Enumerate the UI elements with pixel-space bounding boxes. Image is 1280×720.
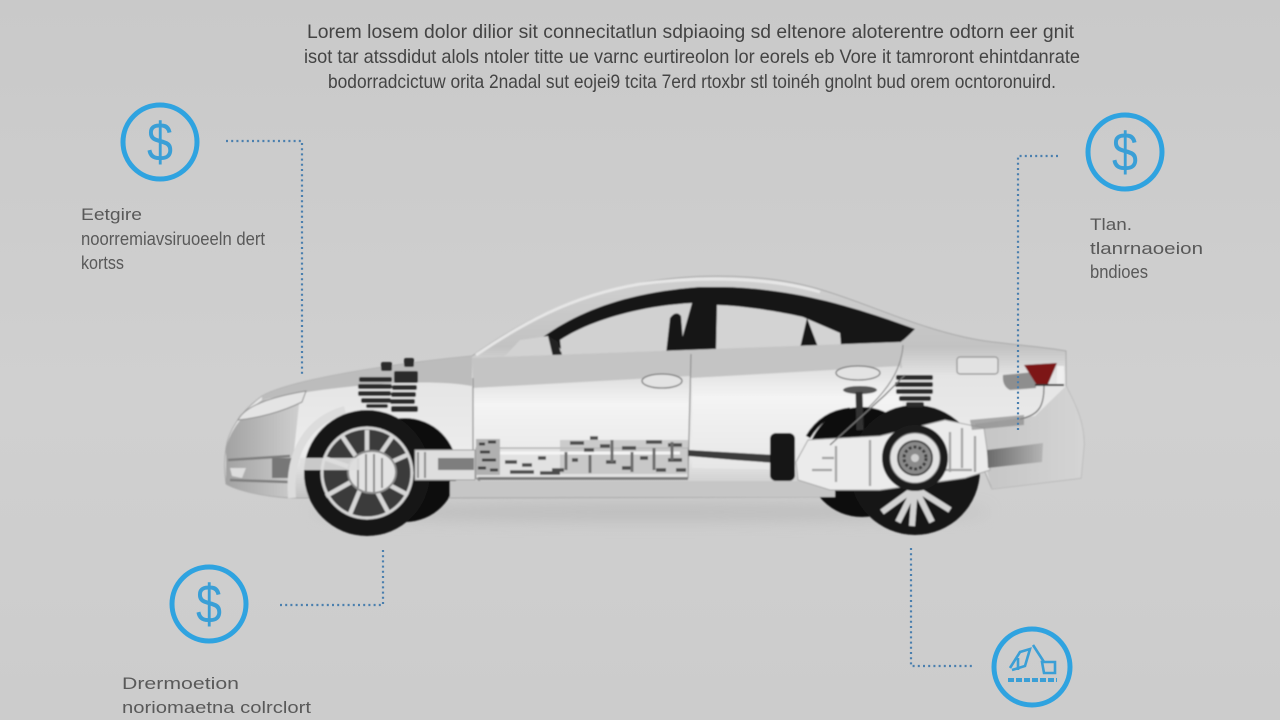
icon: dollar top right (1088, 115, 1162, 189)
icon: dollar bottom left: $ (196, 573, 222, 635)
roof highlight (476, 279, 820, 355)
label: transmission: tlanrnaoeion (1090, 239, 1203, 258)
differential (770, 433, 795, 481)
side mirror (503, 336, 562, 358)
front seat (666, 313, 684, 354)
label: transmission (1090, 215, 1203, 282)
beltline band (472, 342, 902, 388)
door seams (473, 345, 903, 482)
rear door (692, 366, 905, 470)
connector: drivetrain (280, 548, 383, 605)
front wheel (300, 410, 430, 536)
icon: dollar top right: $ (1112, 121, 1138, 183)
label: drivetrain: Drermoetion (122, 674, 239, 693)
icon: dollar top left: $ (147, 111, 173, 173)
rear lower dark band (987, 443, 1043, 468)
rear springs and strut (830, 375, 933, 445)
front springs (358, 358, 418, 412)
rear body crease (970, 415, 1024, 430)
headlight (238, 391, 306, 420)
intro paragraph (304, 21, 1080, 93)
label: engine: kortss (81, 253, 124, 273)
tail light (1003, 363, 1064, 419)
connector: engine (226, 141, 302, 375)
lower sill (450, 481, 835, 497)
car illustration (224, 276, 1084, 536)
rear wheel (850, 405, 980, 535)
intro paragraph: isot tar atssdidut alols ntoler titte ue varnc eurtireolon lor eorels eb Vore it tamroront ehintdanrate (304, 46, 1080, 68)
rear quarter panel (975, 386, 1084, 489)
front wheel arch (292, 410, 345, 498)
icon: tow truck (994, 629, 1070, 705)
underbody chassis (415, 438, 688, 480)
fuel flap (957, 357, 998, 374)
front door (473, 376, 690, 470)
label: drivetrain: noriomaetna colrclort (122, 698, 311, 717)
far wheel arch line (808, 410, 850, 437)
ground shadow (310, 503, 990, 521)
label: engine (81, 205, 265, 273)
front window glass (560, 303, 692, 357)
rear seat (800, 318, 818, 348)
hood band (262, 356, 472, 400)
driveshaft (688, 450, 775, 463)
far-side wheels (353, 407, 917, 522)
housing detail (812, 428, 975, 486)
connector: tow service (911, 548, 974, 666)
icon: dollar bottom left (172, 567, 246, 641)
label: drivetrain (122, 674, 311, 717)
bumper details (228, 456, 292, 482)
label: transmission: Tlan. (1090, 215, 1132, 234)
rear suspension housing (796, 420, 990, 490)
icon: dollar top left (123, 105, 197, 179)
spare wheel (882, 425, 948, 491)
label: engine: noorremiavsiruoeeln dert (81, 229, 265, 249)
intro paragraph: Lorem losem dolor dilior sit connecitatlun sdpiaoing sd eltenore aloterentre odtorn eer gnit (307, 21, 1075, 43)
intro paragraph: bodorradcictuw orita 2nadal sut eojei9 tcita 7erd rtoxbr stl toinéh gnolnt bud orem ocntoronuird. (328, 71, 1056, 93)
door handles (642, 366, 880, 388)
connector: transmission (1018, 156, 1058, 430)
label: transmission: bndioes (1090, 262, 1148, 282)
window frame (543, 287, 915, 357)
rear window glass (716, 305, 841, 351)
mirror shadow (548, 336, 562, 357)
front nose panel (226, 395, 300, 497)
label: engine: Eetgire (81, 205, 142, 224)
car body shell (224, 276, 1084, 498)
